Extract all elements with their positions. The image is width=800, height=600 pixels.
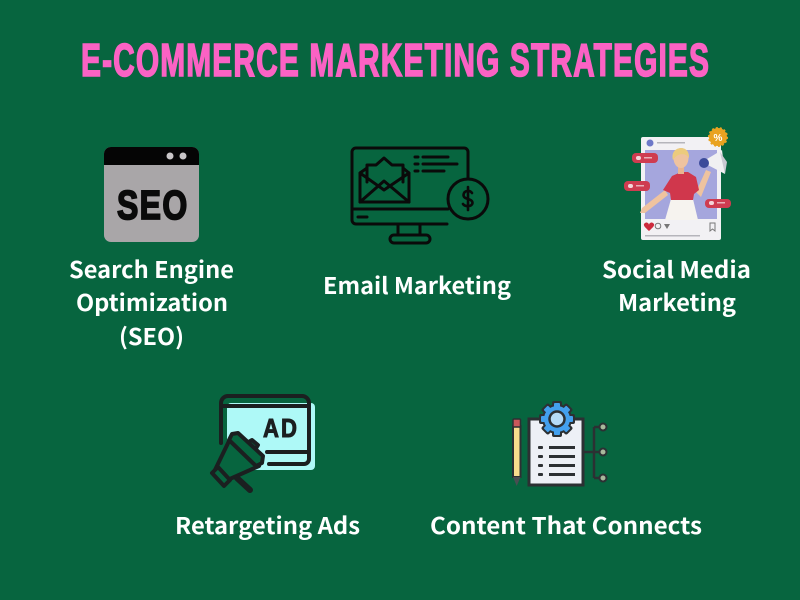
icon: SEO browser window [104,147,199,242]
title: E-COMMERCE MARKETING STRATEGIES [81,36,709,87]
label: Retargeting Ads: Retargeting Ads [175,507,360,541]
discount badge: % [714,133,723,144]
notification pills [624,153,731,208]
label: Social Media Marketing: Marketing [618,284,736,318]
icon: retargeting ad megaphone: AD [263,414,297,443]
label: Content That Connects: Content That Connects [430,507,702,541]
woman figure [640,148,711,220]
icon: SEO browser window: SEO [117,182,187,228]
icon: social media post [624,128,731,240]
icon: email monitor with dollar [352,148,488,243]
label: Search Engine Optimization (SEO): Search Engine [69,251,234,285]
label: Search Engine Optimization (SEO): (SEO) [119,318,184,352]
label: Social Media Marketing: Social Media [602,251,751,285]
icon: retargeting ad megaphone [212,396,315,490]
label: Email Marketing: Email Marketing [323,267,511,301]
pencil [513,419,520,486]
label: Social Media Marketing [602,251,751,318]
label: Search Engine Optimization (SEO) [69,251,234,352]
post actions [644,222,715,236]
megaphone [699,150,727,174]
connector tree [584,424,606,482]
icon: content document with gear [513,401,606,486]
gear [539,401,575,437]
label: Search Engine Optimization (SEO): Optimization [76,284,228,318]
